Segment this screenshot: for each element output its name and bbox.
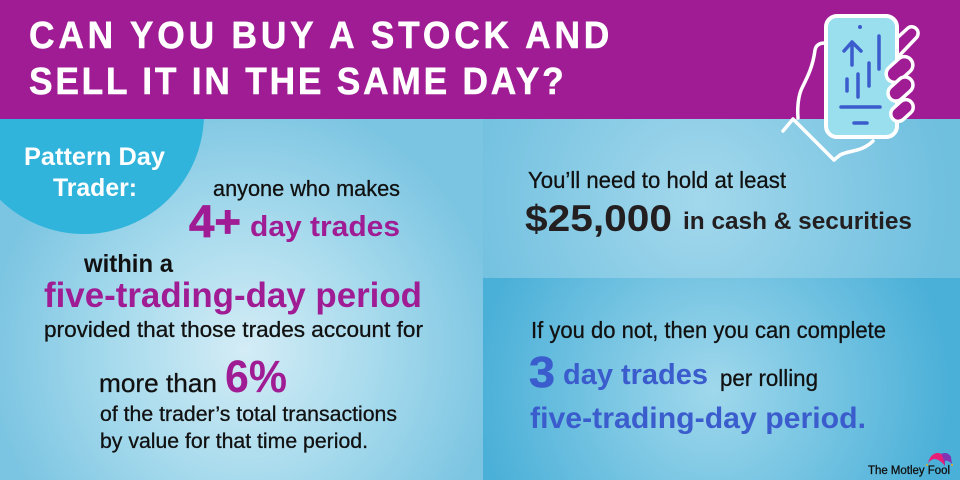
text: provided that those trades account for: provided that those trades account for	[44, 317, 423, 342]
panel: pattern day trader definition	[0, 119, 483, 480]
badge: pattern day trader: Pattern Day	[24, 143, 165, 171]
badge: pattern day trader	[0, 119, 204, 234]
logo: The Motley Fool	[868, 453, 953, 477]
stat: 3 day trades per rolling: per rolling	[720, 365, 818, 391]
text: anyone who makes: anyone who makes	[213, 176, 400, 201]
stat: 4+ day trades	[189, 196, 400, 247]
panel: under the minimum	[483, 278, 960, 480]
title	[29, 14, 609, 102]
text: by value for that time period: by value for that time period.	[100, 430, 368, 453]
stat: 4+ day trades: 4+	[189, 196, 241, 247]
stat: 3 day trades per rolling	[529, 348, 818, 397]
stat: 3 day trades per rolling: 3	[529, 348, 555, 397]
stat: $25,000 in cash and securities: in cash & securities	[683, 208, 912, 235]
icon: hand holding phone	[783, 16, 918, 160]
stat: more than 6%: more than	[99, 368, 217, 398]
title: SELL IT IN THE SAME DAY?	[29, 60, 564, 102]
text: you'll need to hold at least: You’ll need to hold at least	[528, 167, 787, 193]
stat: five-trading-day period: five-trading-day period	[44, 276, 422, 315]
stat: more than 6%	[99, 351, 287, 402]
header band	[0, 0, 960, 119]
badge: pattern day trader: Trader:	[53, 174, 137, 202]
title: CAN YOU BUY A STOCK AND	[29, 14, 609, 56]
text: if you do not: If you do not, then you can complete	[531, 317, 886, 343]
stat: $25,000 in cash and securities	[525, 198, 912, 239]
stat: more than 6%: 6%	[225, 351, 287, 402]
stat: $25,000 in cash and securities: $25,000	[525, 198, 672, 239]
stat: 4+ day trades: day trades	[250, 211, 400, 243]
stat: five-trading-day period: five-trading-day period.	[530, 402, 866, 435]
logo: The Motley Fool: The Motley Fool	[868, 465, 950, 477]
panel: cash requirement	[483, 119, 960, 278]
text: of the trader's total transactions: of the trader’s total transactions	[100, 403, 397, 426]
stat: 3 day trades per rolling: day trades	[563, 359, 708, 391]
text: within a: within a	[83, 250, 174, 278]
